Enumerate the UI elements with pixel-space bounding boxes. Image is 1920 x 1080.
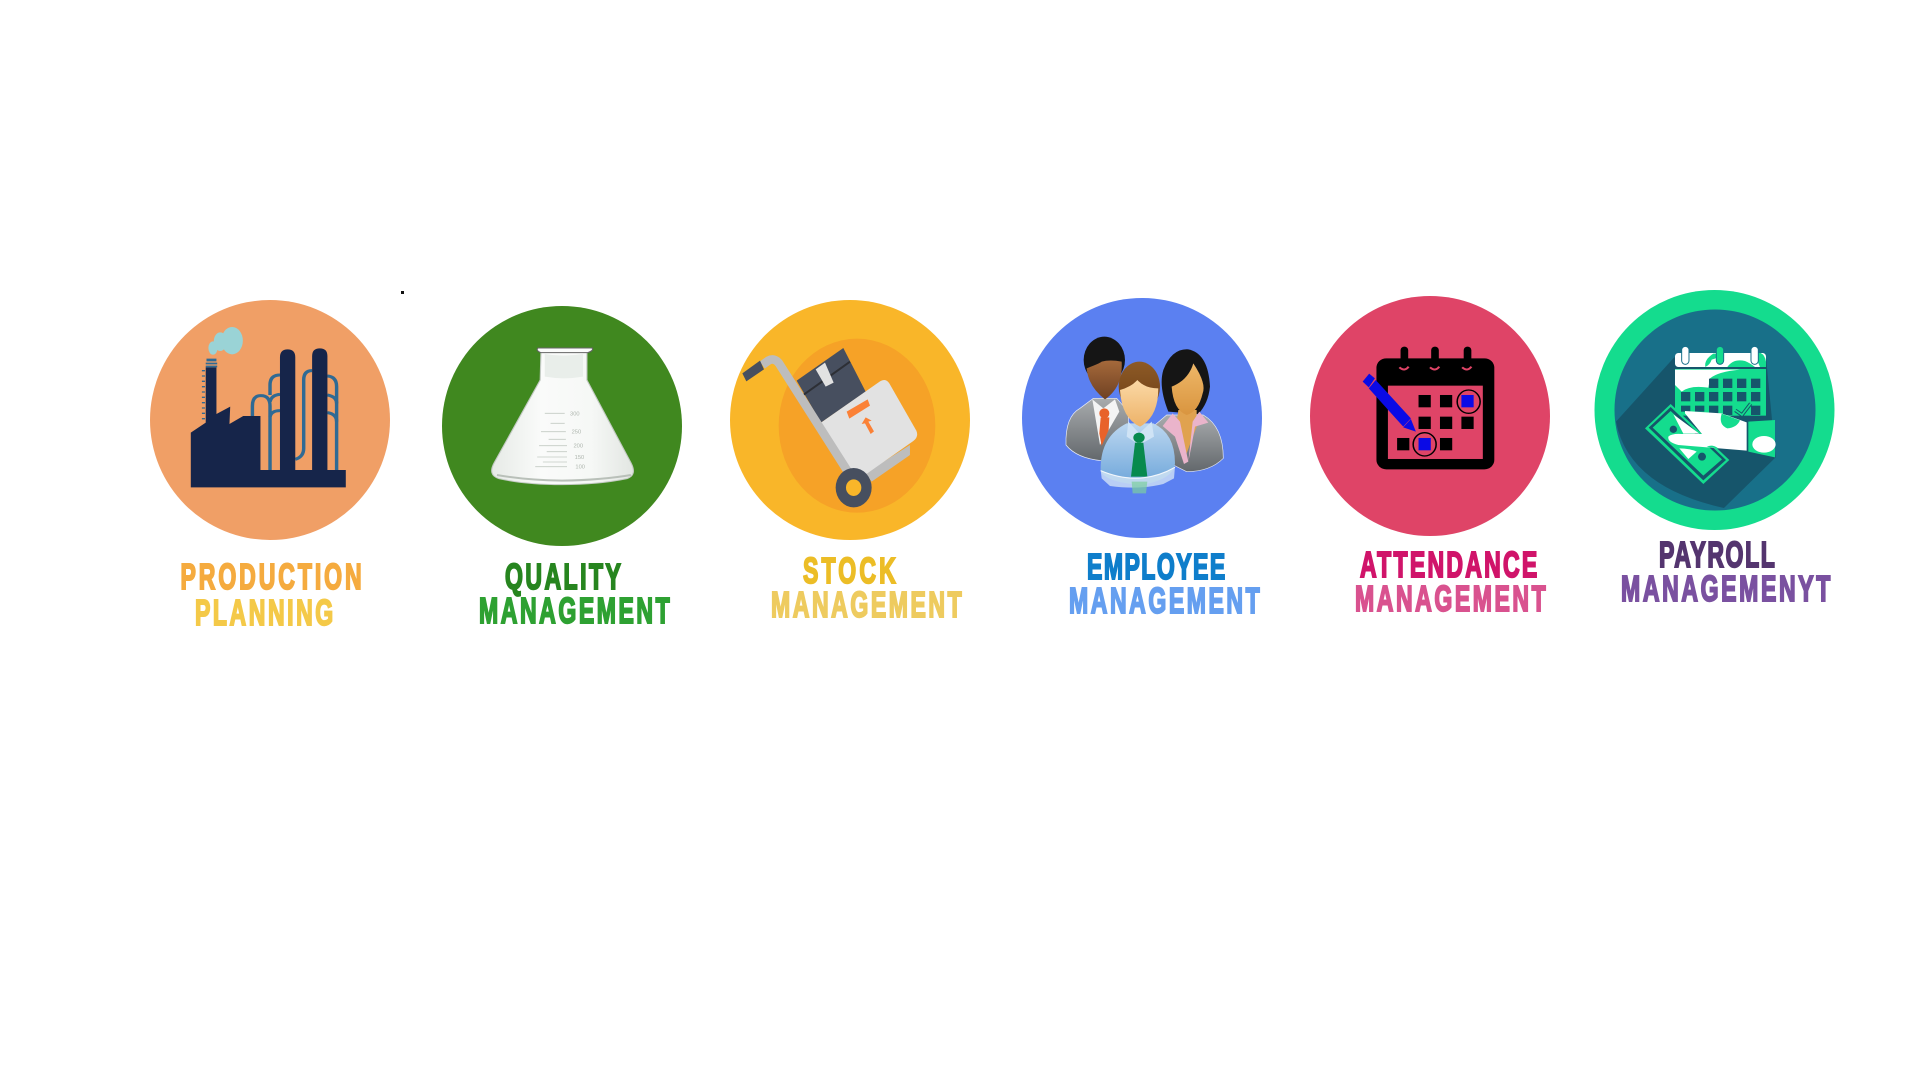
- icon: payroll calendar and cash in hand: [1645, 346, 1776, 484]
- panel: stock management: [730, 300, 970, 625]
- panel: payroll management: [1594, 290, 1834, 609]
- icon: three business people: [1066, 337, 1223, 493]
- icon: factory: [191, 327, 346, 487]
- circle: attendance background: [1310, 296, 1550, 536]
- circle: employee background: [1022, 298, 1262, 538]
- label: employee management: EMPLOYEE: [1087, 548, 1225, 587]
- panel: attendance management: [1310, 296, 1550, 619]
- shadow: long shadow: [1616, 357, 1776, 508]
- label: employee management: [1069, 548, 1260, 621]
- label: payroll management: PAYROLL: [1659, 536, 1775, 575]
- panel: quality management: [442, 306, 682, 631]
- icon: flask: 200: [573, 444, 583, 450]
- label: stock management: MANAGEMENT: [771, 586, 962, 625]
- circle: quality background: [442, 306, 682, 546]
- label: quality management: [479, 558, 670, 631]
- panel: employee management: [1022, 298, 1262, 621]
- label: production planning: PRODUCTION: [180, 558, 362, 597]
- label: attendance management: ATTENDANCE: [1360, 546, 1537, 585]
- panel: production planning: [150, 300, 390, 633]
- label: attendance management: MANAGEMENT: [1355, 580, 1546, 619]
- circle: payroll outer ring: [1594, 290, 1834, 530]
- circle: production background: [150, 300, 390, 540]
- label: payroll management: MANAGEMENYT: [1621, 570, 1831, 609]
- circle: stock background: [730, 300, 970, 540]
- label: production planning: [180, 558, 362, 633]
- circle: payroll inner disc: [1614, 310, 1816, 510]
- label: payroll management: [1621, 536, 1831, 609]
- icon: flask: 150: [575, 455, 584, 461]
- label: attendance management: [1355, 546, 1546, 619]
- icon: flask: 250: [572, 430, 581, 435]
- icon: flask: 300: [570, 412, 580, 417]
- icon: calendar with pen: [1363, 350, 1494, 469]
- icon: flask: [492, 348, 633, 485]
- label: production planning: PLANNING: [195, 594, 333, 633]
- icon: flask: 100: [575, 465, 585, 470]
- label: employee management: MANAGEMENT: [1069, 582, 1260, 621]
- label: stock management: STOCK: [803, 552, 896, 591]
- label: quality management: MANAGEMENT: [479, 592, 670, 631]
- icon: hand truck with boxes: [742, 339, 935, 513]
- label: stock management: [771, 552, 962, 625]
- label: quality management: QUALITY: [505, 558, 621, 597]
- stray black dot: [401, 291, 404, 294]
